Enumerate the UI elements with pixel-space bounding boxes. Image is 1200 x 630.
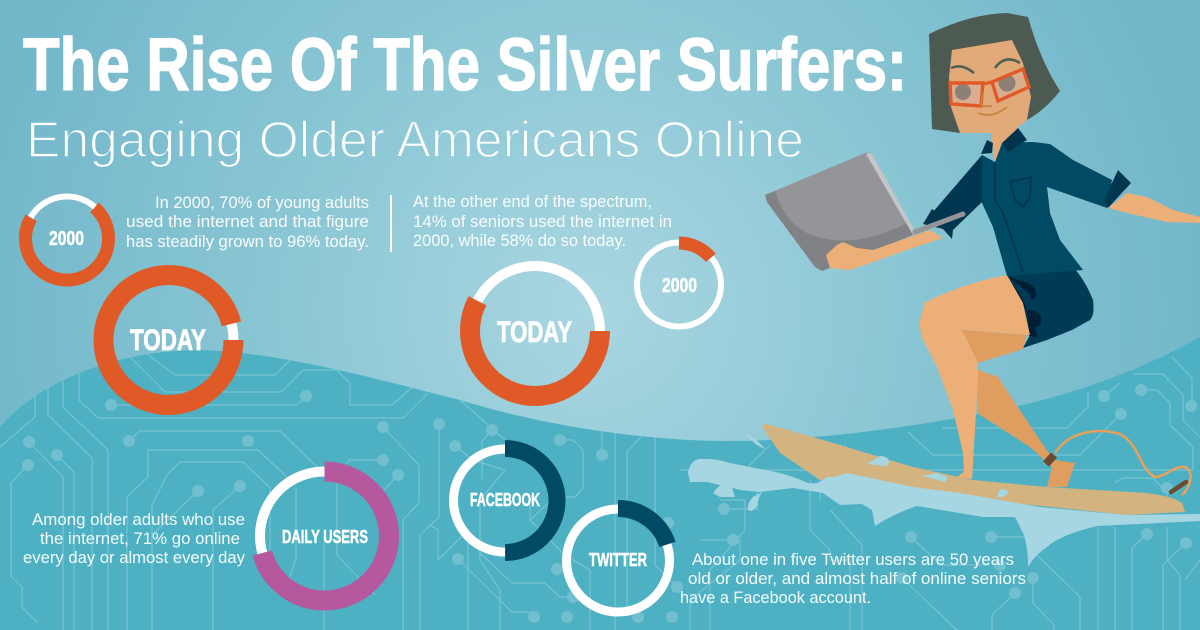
donut: seniors 2000 [637,242,721,326]
ankle strap [1046,455,1054,464]
surfboard [762,424,1185,515]
donut: daily users: DAILY USERS [282,527,368,547]
shorts [1007,267,1094,348]
text block: seniors: 2000, while 58% do so today. [413,232,626,250]
text block: daily users: Among older adults who use [32,511,245,529]
text block: young adults: In 2000, 70% of young adults [155,194,369,212]
donut: young adults 2000 [8,180,126,297]
circuit board pattern on wave [0,345,1200,630]
right arm [1108,193,1200,223]
donut: young adults 2000: 2000 [49,228,84,250]
donut: facebook [453,448,557,552]
title: The Rise Of The Silver Surfers: [23,23,907,106]
face [949,40,1031,133]
text block: social media: About one in five Twitter users are 50 years [692,551,1014,569]
shirt [982,142,1112,276]
text block: daily users [23,511,246,567]
text block: social media [680,551,1026,607]
text block: daily users: every day or almost every day [23,549,246,567]
illustration: surfer on board [688,13,1200,567]
donut: seniors today [470,266,600,396]
text block: social media: old or older, and almost half of online seniors [688,570,1026,588]
donut: young adults today: TODAY [130,324,206,357]
laptop [765,153,914,271]
eyebrows [951,59,1020,73]
collar [981,128,1027,154]
text block: young adults [126,194,369,251]
text block: young adults: used the internet and that figure [126,213,369,231]
neck [992,125,1017,162]
left cuff [923,209,953,239]
front leg [919,275,1030,479]
donut: facebook: FACEBOOK [470,490,540,510]
thigh shadow [962,330,1027,363]
text block: seniors: At the other end of the spectrum, [413,193,652,211]
text block: seniors [413,193,672,250]
donut: young adults today [104,275,234,405]
text block: seniors: 14% of seniors used the internet in [413,213,672,231]
hair [929,13,1060,133]
ankle leash [1055,431,1191,495]
left sleeve [932,155,982,230]
shorts swirl detail [1007,276,1041,338]
subtitle: Engaging Older Americans Online [26,111,804,168]
donut: twitter: TWITTER [589,550,647,570]
left arm and hand [826,230,943,270]
glasses [950,69,1029,106]
water splash [688,433,1200,567]
shirt details [995,163,1031,272]
back leg [977,370,1075,487]
nose and mouth [978,92,1007,115]
donut: daily users [260,472,389,600]
donut: seniors today: TODAY [497,316,572,349]
right cuff [1104,170,1131,208]
donut: seniors 2000: 2000 [662,275,697,297]
eyes [950,69,1029,106]
text block: social media: have a Facebook account. [680,589,871,607]
laptop base [915,214,963,232]
text block: daily users: the internet, 71% go online [40,530,240,548]
text block: young adults: has steadily grown to 96% today. [126,233,369,251]
wave [0,337,1200,630]
donut: twitter [566,508,670,612]
leash plug [1171,482,1186,492]
